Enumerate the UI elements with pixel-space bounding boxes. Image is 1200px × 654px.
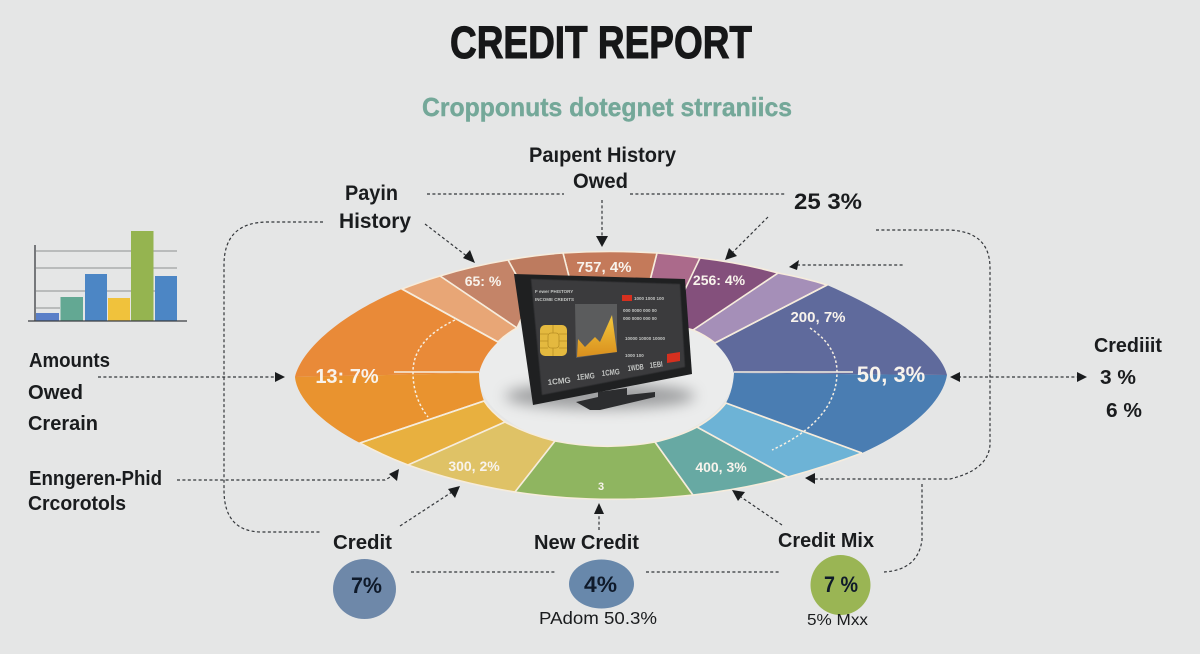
callout: credit <box>333 532 396 619</box>
screen text: 1CMG <box>601 367 620 378</box>
donut chart <box>295 252 947 499</box>
label: amounts owed crerain: Amounts <box>29 350 110 372</box>
segment labels: 300, 2% <box>448 458 500 474</box>
arrow: new credit <box>594 503 604 530</box>
segment: peach <box>402 276 517 342</box>
screen text: 1EBI <box>649 360 663 370</box>
label: payment history owed: Paıpent History <box>529 144 676 167</box>
arrow: 25 3% <box>725 217 768 260</box>
arrowhead: credit mix outer <box>805 473 815 484</box>
screen text: 1WDB <box>627 362 644 373</box>
arrow: crediiit double <box>950 372 1087 382</box>
screen text: F ewer PHISTORY <box>535 289 573 294</box>
title: CREDIT REPORT <box>450 17 752 68</box>
callout: new credit <box>534 532 657 628</box>
callout: new credit: PAdom 50.3% <box>539 608 657 628</box>
arrowhead: upper right line <box>789 260 799 270</box>
label: enngeren-phid crcorotols: Enngeren-Phid <box>29 468 162 490</box>
arrow: payin history <box>425 224 475 263</box>
arrow: enngeren-phid <box>177 469 399 481</box>
label: crediiit: 3 % <box>1100 367 1136 389</box>
segment: pink <box>645 253 700 300</box>
label: enngeren-phid crcorotols: Crcorotols <box>28 493 126 515</box>
screen text: 000 0000 000 00 <box>623 316 657 321</box>
screen text: 000 0000 000 00 <box>623 308 657 313</box>
label: crediiit: Crediiit <box>1094 335 1162 357</box>
label: amounts owed crerain <box>28 350 110 435</box>
callout: new credit: 4% <box>584 572 617 597</box>
callout: credit mix: 7 % <box>824 572 858 597</box>
label: payment history owed <box>529 144 676 193</box>
callout: credit mix: 5% Mxx <box>807 612 868 629</box>
callout: credit: 7% <box>351 573 382 598</box>
inner disc <box>478 299 734 447</box>
subtitle: Cropponuts dotegnet strraniics <box>422 92 792 122</box>
monitor screen <box>531 279 685 395</box>
area chart <box>575 304 617 358</box>
segment: plum <box>675 258 778 330</box>
label: payment history owed: Owed <box>573 170 628 193</box>
segment: light purple <box>693 273 827 343</box>
segment: amber <box>360 401 505 465</box>
arrow: credit <box>400 486 460 526</box>
segment: terracotta <box>563 252 657 300</box>
segment: green <box>515 441 693 499</box>
connector: outer left rounded path <box>224 222 323 532</box>
segment labels: 50, 3% <box>857 362 925 387</box>
monitor body <box>514 274 692 405</box>
segment labels: 757, 4% <box>576 259 632 276</box>
callout: credit: Credit <box>333 532 392 554</box>
segment: brown <box>508 253 575 300</box>
red badges <box>622 295 680 363</box>
screen text: 10000 10000 10000 <box>625 336 666 341</box>
segment: light blue <box>697 403 862 477</box>
monitor <box>505 274 695 410</box>
screen text <box>535 289 666 387</box>
segment: orange lower <box>295 373 484 443</box>
label: payin history: History <box>339 210 411 233</box>
label: payin history <box>339 182 411 233</box>
screen text: 1000 100 <box>625 353 644 358</box>
arrow: credit mix <box>732 490 782 525</box>
monitor stand <box>576 388 655 410</box>
monitor shadow <box>505 383 695 409</box>
label: enngeren-phid crcorotols <box>28 468 162 515</box>
callout: new credit: New Credit <box>534 532 639 554</box>
connector: right drop to credit mix <box>884 484 922 572</box>
segment labels: 65: % <box>465 273 502 289</box>
centre lines <box>394 371 853 373</box>
callout: credit mix: Credit Mix <box>778 530 874 552</box>
segment: orange upper <box>295 289 498 377</box>
connector: bottom dashes <box>411 571 780 573</box>
label: crediiit <box>1094 335 1162 422</box>
divider: orange <box>360 285 862 453</box>
dashed arcs <box>413 320 837 450</box>
screen text: INCOME CREDITS <box>535 297 574 302</box>
label: crediiit: 6 % <box>1106 400 1142 422</box>
label: amounts owed crerain: Owed <box>28 382 83 404</box>
screen text: 1CMG <box>547 376 571 387</box>
connector: outer right rounded path <box>815 230 990 479</box>
connector: top dashes <box>427 193 785 195</box>
arrow: amounts owed <box>98 372 285 382</box>
segment labels: 256: 4% <box>693 272 746 288</box>
segment: pale yellow <box>408 422 555 492</box>
segment: tan <box>440 260 530 328</box>
bar chart <box>28 231 187 321</box>
segment labels: 200, 7% <box>790 309 846 326</box>
label: amounts owed crerain: Crerain <box>28 413 98 435</box>
arrow: payment history <box>596 200 608 247</box>
label: 25 3%: 25 3% <box>794 189 862 214</box>
segment labels: 400, 3% <box>695 459 747 475</box>
screen text: 1000 1000 100 <box>634 296 665 301</box>
segment labels <box>315 259 925 493</box>
connector: upper right line <box>797 264 903 266</box>
segment labels: 13: 7% <box>315 366 379 388</box>
label: payin history: Payin <box>345 182 398 205</box>
segment: blue <box>726 373 947 453</box>
segment: purple <box>715 285 947 375</box>
segment: teal <box>655 427 788 495</box>
callout: credit mix <box>778 530 874 629</box>
segment labels: 3 <box>598 481 604 493</box>
chip icon <box>540 325 567 356</box>
screen text: 1EMG <box>576 371 595 382</box>
